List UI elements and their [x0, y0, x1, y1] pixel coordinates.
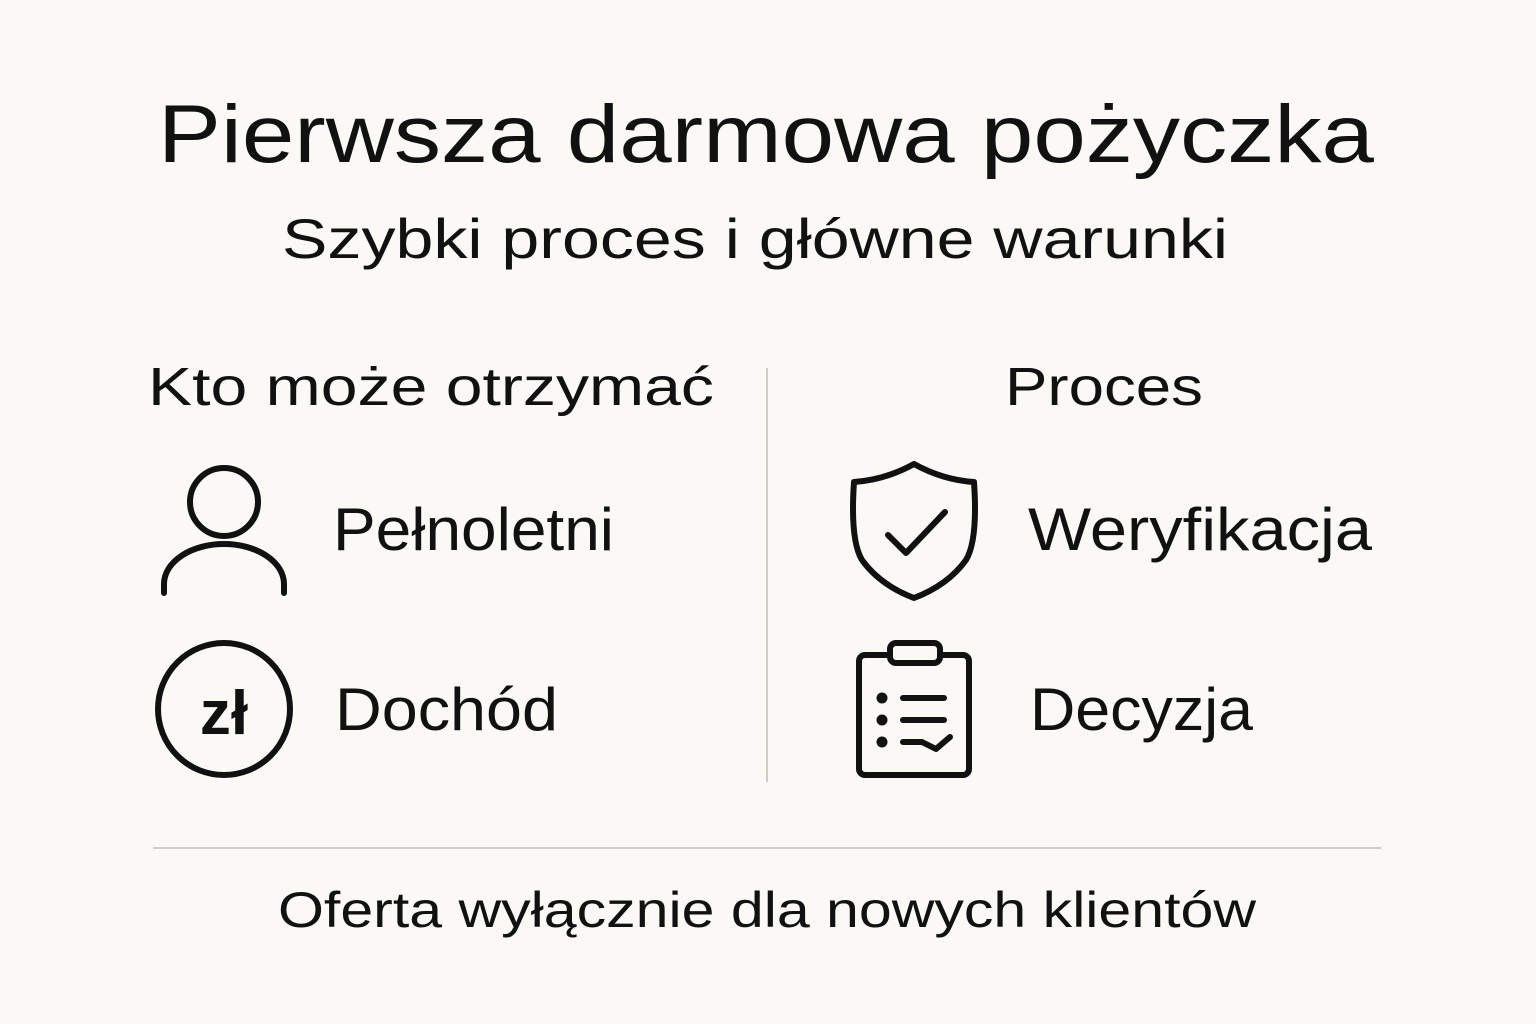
panel: eligibility [148, 357, 714, 775]
text: Decyzja: Decyzja [1030, 676, 1254, 743]
heading: Kto może otrzymać: Kto może otrzymać [148, 357, 714, 417]
icon: person [164, 468, 284, 593]
icon: zl coin: zł [200, 679, 248, 748]
title: Pierwsza darmowa pożyczka [158, 89, 1374, 180]
heading: Proces: Proces [1005, 357, 1203, 417]
icon: clipboard [859, 643, 969, 775]
text: Weryfikacja: Weryfikacja [1028, 496, 1373, 563]
text: Dochód: Dochód [335, 676, 558, 743]
subtitle: Szybki proces i główne warunki [282, 207, 1228, 270]
footer note: Oferta wyłącznie dla nowych klientów [278, 882, 1257, 938]
text: Pełnoletni: Pełnoletni [333, 496, 614, 563]
icon: shield check [853, 464, 975, 598]
panel: process [853, 357, 1373, 775]
icon: zl coin [158, 643, 290, 775]
